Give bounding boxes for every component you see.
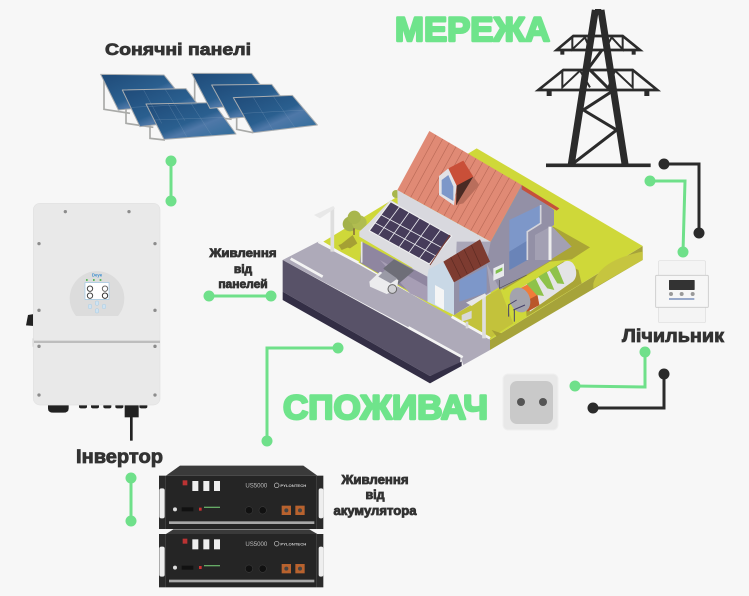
label: power from battery: акумулятора bbox=[334, 504, 418, 518]
label: power from battery: Живлення bbox=[340, 473, 408, 487]
dormer bbox=[439, 161, 479, 205]
street lamps and mailbox bbox=[314, 206, 502, 338]
road bbox=[283, 242, 490, 383]
ground platform bbox=[323, 148, 643, 350]
label: power from panels: Живлення bbox=[208, 246, 276, 260]
connector: inverter to battery bbox=[126, 472, 136, 526]
label: power from battery bbox=[334, 473, 418, 518]
connector: battery to house bbox=[262, 342, 344, 446]
icon: electricity meter bbox=[656, 261, 708, 323]
house walls bbox=[397, 185, 572, 315]
tree bbox=[340, 190, 400, 248]
label: inverter: Інвертор bbox=[76, 447, 163, 468]
connector: grid dark line bbox=[658, 158, 704, 238]
battery unit 2: US5000 bbox=[245, 541, 268, 548]
car bbox=[369, 259, 414, 294]
main roof bbox=[397, 131, 559, 242]
battery unit 1: US5000 bbox=[245, 483, 268, 490]
label: meter: Лічильник bbox=[622, 326, 725, 346]
label: power from battery: від bbox=[365, 488, 385, 502]
connector: dark line to socket bbox=[588, 368, 670, 414]
carport with solar panel bbox=[359, 200, 452, 302]
icon: battery stack bbox=[159, 466, 323, 587]
battery unit 2: PYLONTECH bbox=[280, 541, 306, 546]
battery unit 1 bbox=[159, 466, 323, 529]
icon: inverter bbox=[26, 203, 160, 441]
label: power from panels: панелей bbox=[218, 277, 268, 291]
connector: meter to socket bbox=[570, 346, 650, 392]
icon: transmission tower bbox=[538, 10, 657, 165]
label: power from panels: від bbox=[234, 262, 253, 276]
garage extension bbox=[427, 239, 527, 315]
storage battery bbox=[506, 261, 582, 322]
connector: panel power bbox=[204, 290, 276, 302]
icon: solar panels bbox=[101, 73, 317, 140]
heading: consumer: СПОЖИВАЧ bbox=[283, 389, 488, 427]
heading: grid: МЕРЕЖА bbox=[395, 11, 550, 49]
label: power from panels bbox=[208, 246, 276, 291]
heading: solar panels: Сонячні панелі bbox=[105, 40, 251, 59]
icon: inverter: Deye bbox=[92, 273, 103, 278]
connector: grid green line bbox=[644, 176, 688, 258]
icon: socket bbox=[503, 374, 558, 430]
battery unit 1: PYLONTECH bbox=[280, 483, 306, 488]
battery unit 2 bbox=[159, 529, 323, 587]
illustration: isometric house bbox=[283, 131, 643, 383]
connector: panels to inverter bbox=[166, 156, 176, 206]
